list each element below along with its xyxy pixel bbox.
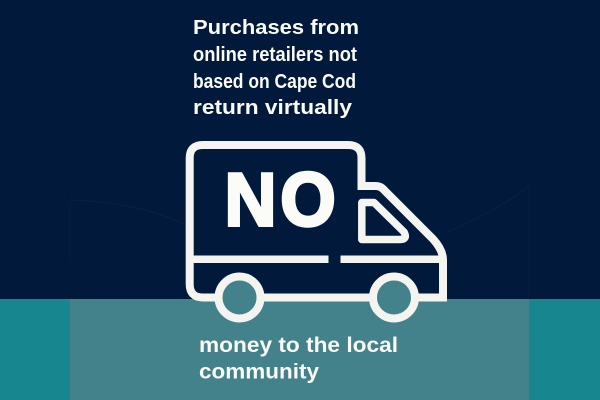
background: teal ground band (0, 299, 600, 400)
heading text: online retailers not (193, 44, 357, 66)
heading text: return virtually (193, 96, 353, 119)
background: navy upper area (0, 0, 600, 299)
NO label: N (224, 158, 276, 242)
icon: delivery truck (190, 145, 443, 318)
truck window (362, 202, 405, 240)
heading text: based on Cape Cod (193, 71, 356, 93)
heading text (193, 16, 359, 119)
closing text: community (199, 360, 319, 384)
truck divider (190, 256, 443, 263)
front wheel (373, 276, 415, 318)
rear wheel (218, 276, 260, 318)
heading text: Purchases from (193, 16, 359, 39)
closing text: money to the local (199, 334, 398, 357)
NO label: O (280, 158, 336, 242)
closing text (199, 334, 398, 384)
NO label (224, 158, 336, 242)
truck body outline (190, 145, 443, 298)
